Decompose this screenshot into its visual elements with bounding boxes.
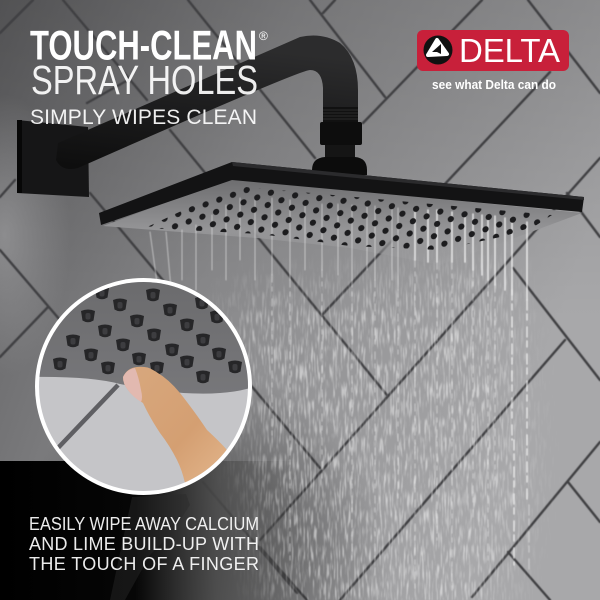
heading: Touch-Clean: TOUCH-CLEAN (30, 22, 257, 68)
spray holes (148, 187, 552, 250)
wall mount plate (17, 120, 89, 197)
shower head plate (99, 162, 584, 225)
shower head underside (103, 178, 582, 265)
Delta logo (417, 30, 569, 71)
icon: delta emblem (424, 36, 452, 64)
caption text: EASILY WIPE AWAY CALCIUM (29, 514, 259, 534)
registered mark: ® (259, 29, 268, 43)
dark lower-left fixture area (0, 370, 390, 600)
magnified holes (53, 286, 242, 383)
water streaks (149, 197, 538, 600)
diffuse spray texture (228, 260, 538, 600)
heading: Spray Holes: SPRAY HOLES (31, 57, 258, 103)
finger (123, 367, 227, 483)
shower arm and elbow (56, 35, 367, 175)
caption text (29, 514, 259, 574)
grout line in inset (57, 385, 118, 449)
caption text: THE TOUCH OF A FINGER (29, 554, 259, 574)
inset head underside (39, 282, 248, 394)
threaded collar (312, 107, 367, 175)
magnified circle inset (35, 278, 252, 495)
subheading: SIMPLY WIPES CLEAN (30, 106, 257, 129)
caption text: AND LIME BUILD-UP WITH (29, 534, 259, 554)
fingernail (123, 368, 142, 402)
logo wordmark: DELTA (459, 32, 560, 69)
logo tagline: see what Delta can do (432, 77, 556, 92)
